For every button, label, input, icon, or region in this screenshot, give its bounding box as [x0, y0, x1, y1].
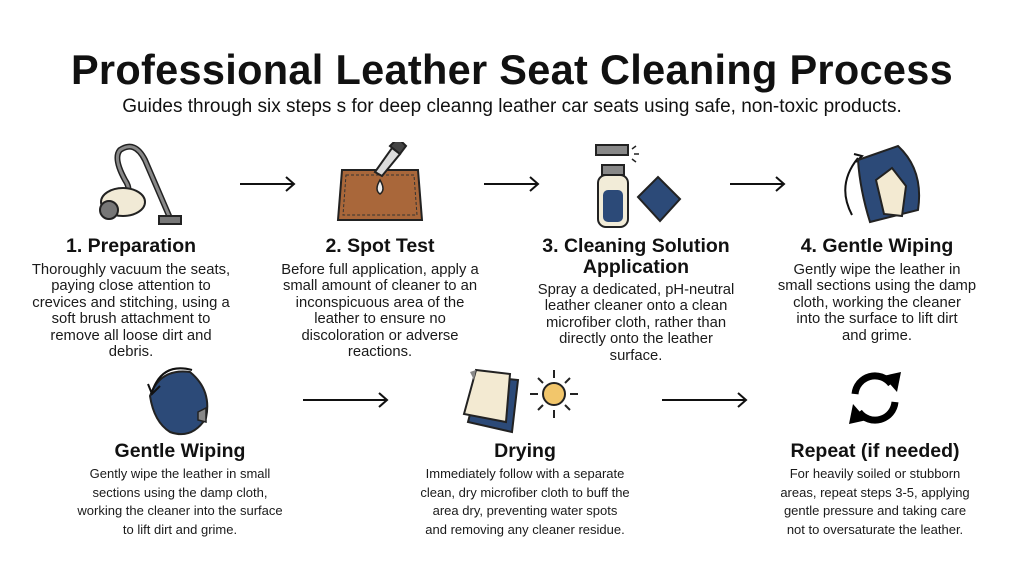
text 4: into the surface to lift dirt: [796, 311, 958, 327]
arrow 3: [730, 176, 786, 192]
arrow 2: [484, 176, 540, 192]
icon: wiping hand: [844, 144, 920, 224]
text 4: [778, 262, 976, 344]
icon: spray bottle and cloth: [595, 144, 682, 228]
text 1: [32, 262, 230, 360]
step 6: [420, 440, 630, 536]
text 1: debris.: [109, 344, 153, 360]
text 7: gentle pressure and taking care: [784, 503, 966, 518]
text 7: areas, repeat steps 3-5, applying: [780, 484, 970, 500]
step 1: [32, 235, 230, 360]
text 1: crevices and stitching, using a: [32, 295, 230, 311]
icon: cloth and sun: [462, 368, 578, 434]
text 1: paying close attention to: [51, 278, 211, 294]
text 2: Before full application, apply a: [281, 262, 479, 278]
heading 4: 4. Gentle Wiping: [801, 235, 953, 257]
text 3: [538, 282, 734, 364]
text 5: Gently wipe the leather in small: [90, 466, 270, 481]
arrow 6: [662, 392, 748, 408]
text 6: [420, 466, 630, 536]
step 2: [281, 235, 479, 360]
heading 6: Drying: [494, 440, 556, 462]
text 5: sections using the damp cloth,: [93, 484, 267, 500]
text 4: cloth, working the cleaner: [793, 295, 961, 311]
subtitle: Guides through six steps s for deep cleanng leather car seats using safe, non-toxic products.: [122, 96, 902, 117]
text 6: and removing any cleaner residue.: [425, 522, 625, 536]
text 4: small sections using the damp: [778, 278, 976, 294]
step 4: [778, 235, 976, 344]
text 1: remove all loose dirt and: [50, 328, 212, 344]
text 2: inconspicuous area of the: [296, 295, 464, 311]
heading 3: 3. Cleaning Solution: [542, 235, 730, 257]
step 3: [538, 235, 734, 364]
heading 5: Gentle Wiping: [115, 440, 245, 462]
text 2: small amount of cleaner to an: [283, 278, 477, 294]
text 7: For heavily soiled or stubborn: [790, 466, 960, 481]
text 1: Thoroughly vacuum the seats,: [32, 262, 230, 278]
arrow 1: [240, 176, 296, 192]
heading 7: Repeat (if needed): [790, 440, 960, 462]
text 2: leather to ensure no: [314, 311, 446, 327]
text 5: to lift dirt and grime.: [123, 522, 237, 536]
text 7: not to oversaturate the leather.: [787, 522, 963, 536]
text 6: area dry, preventing water spots: [433, 503, 617, 518]
text 2: reactions.: [348, 344, 412, 360]
text 5: [77, 466, 283, 536]
text 2: discoloration or adverse: [301, 328, 459, 344]
step 5: [77, 440, 283, 536]
text 6: clean, dry microfiber cloth to buff the: [420, 484, 630, 500]
arrow 5: [303, 392, 388, 408]
icon: spot test: [336, 142, 424, 221]
heading 2: 2. Spot Test: [325, 235, 435, 257]
text 4: Gently wipe the leather in: [794, 262, 960, 278]
text 3: leather cleaner onto a clean: [545, 298, 727, 314]
icon: vacuum: [99, 144, 182, 225]
step 7: [780, 440, 970, 536]
text 4: and grime.: [842, 328, 912, 344]
icon: wiping cloth circle: [147, 367, 208, 436]
text 1: soft brush attachment to: [52, 311, 210, 327]
text 3: directly onto the leather: [559, 331, 713, 347]
heading 3: Application: [583, 256, 689, 278]
text 3: Spray a dedicated, pH-neutral: [538, 282, 734, 298]
text 5: working the cleaner into the surface: [77, 503, 283, 518]
heading 3: [542, 235, 730, 278]
text 7: [780, 466, 970, 536]
text 6: Immediately follow with a separate: [426, 466, 624, 481]
text 3: surface.: [610, 348, 662, 364]
icon: repeat: [849, 372, 901, 424]
text 3: microfiber cloth, rather than: [546, 315, 726, 331]
text 2: [281, 262, 479, 360]
heading 1: 1. Preparation: [66, 235, 196, 257]
title: Professional Leather Seat Cleaning Process: [71, 46, 953, 93]
